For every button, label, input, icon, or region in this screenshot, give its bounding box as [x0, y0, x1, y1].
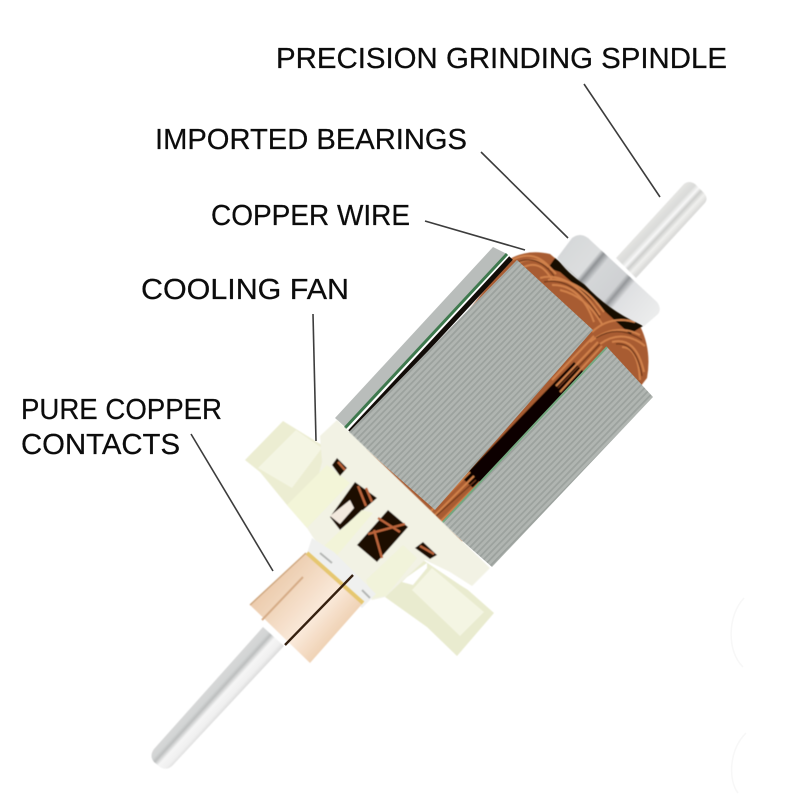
label: copper wire	[211, 200, 525, 250]
top spindle	[616, 182, 706, 278]
label: pure copper contacts: PURE COPPER	[21, 394, 222, 426]
label: imported bearings	[155, 124, 568, 238]
bottom spindle	[152, 627, 284, 769]
bearing	[557, 235, 660, 326]
front lamination plate	[442, 347, 653, 567]
upper blade block	[287, 465, 350, 528]
label: pure copper contacts: CONTACTS	[21, 429, 180, 461]
lower fan wing	[385, 560, 494, 656]
label: pure copper contacts	[21, 394, 273, 571]
fan windows	[330, 458, 437, 562]
label: copper wire: COPPER WIRE	[211, 200, 410, 232]
white slot highlight	[402, 563, 427, 585]
faint background arcs	[731, 598, 746, 793]
upper fan wing	[245, 421, 350, 528]
commutator slot	[285, 575, 353, 645]
fan blades	[323, 510, 373, 560]
cooling fan cage	[245, 420, 494, 656]
motor illustration	[152, 182, 706, 769]
label: precision grinding spindle	[276, 43, 727, 197]
label: imported bearings: IMPORTED BEARINGS	[155, 124, 467, 156]
dark recesses	[548, 258, 643, 334]
white contact ring	[306, 538, 376, 608]
main lamination plate	[348, 260, 593, 510]
label: precision grinding spindle: PRECISION GRINDING SPINDLE	[276, 43, 727, 75]
label: cooling fan: COOLING FAN	[141, 274, 349, 306]
cream collar and cage body	[305, 420, 490, 600]
copper seen through windows	[338, 462, 434, 558]
pure copper commutator	[250, 553, 363, 663]
back lamination plate	[335, 247, 511, 432]
polished shaft highlight	[330, 500, 354, 524]
label: cooling fan	[141, 274, 349, 441]
copper windings	[350, 252, 648, 560]
